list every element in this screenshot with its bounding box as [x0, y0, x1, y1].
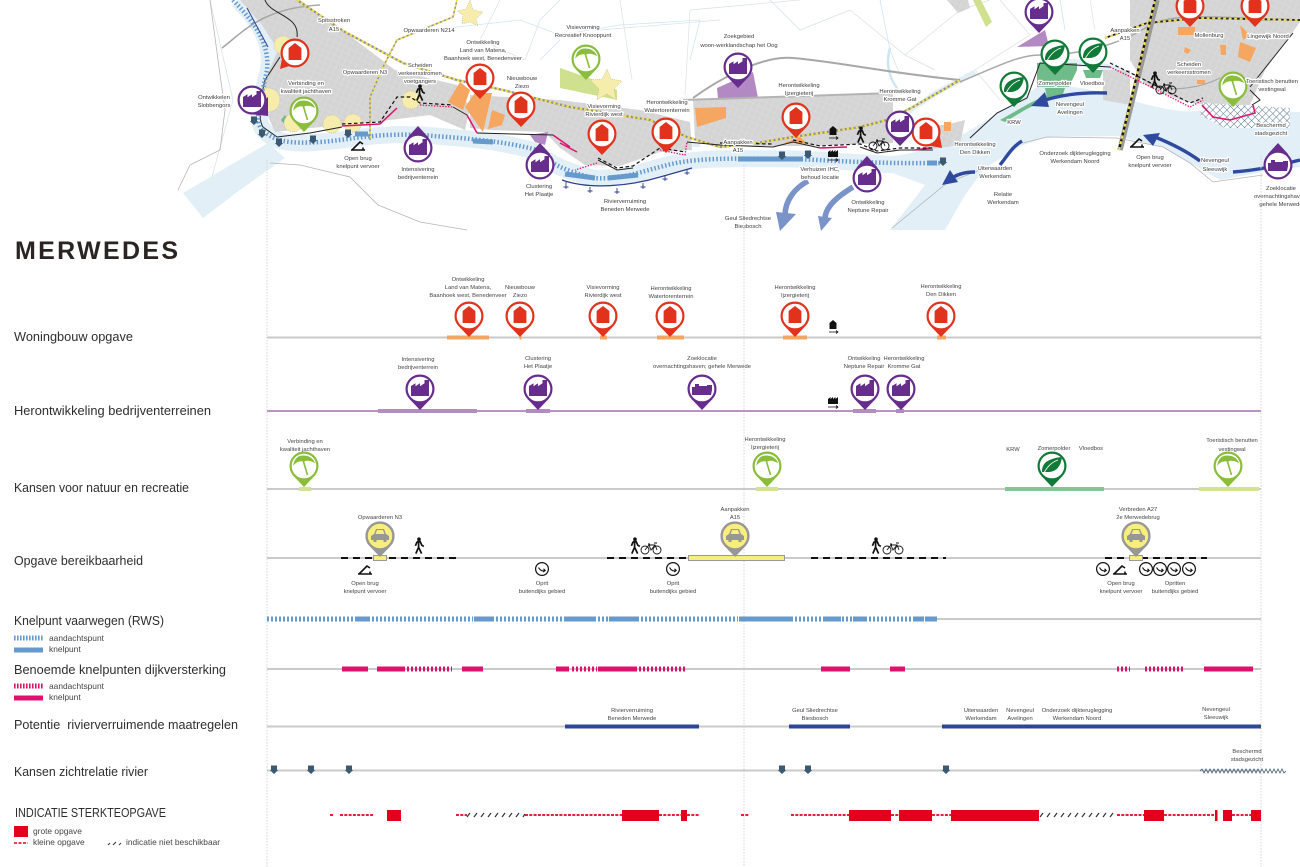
row: Opgave bereikbaarheid: knelpunt vervoer: [344, 589, 386, 595]
map labels: A15: [1120, 36, 1130, 42]
map labels: Intensivering: [401, 167, 435, 173]
map labels: Verbinding en: [288, 81, 324, 87]
row: Herontwikkeling bedrijventerreinen: Clustering: [525, 356, 551, 362]
map labels: Neptune Repair: [848, 208, 889, 214]
map labels: Werkendam: [987, 200, 1019, 206]
row: Opgave bereikbaarheid: Open brug: [1107, 581, 1135, 587]
map labels: Uiterwaarden: [978, 166, 1012, 172]
map labels: Nevengeul: [1201, 158, 1229, 164]
map labels: A15: [329, 27, 339, 33]
map labels: vestingwal: [1258, 87, 1286, 93]
map pins: factories: [405, 0, 1052, 191]
map labels: Ijzergieterij: [785, 91, 813, 97]
map labels: Herontwikkeling: [778, 83, 820, 89]
map labels: Nieuwbouw: [507, 76, 538, 82]
row: Potentie rivierverruimende maatregelen: Rivierverruiming: [611, 708, 653, 714]
row: Woningbouw opgave: Herontwikkeling: [651, 286, 691, 292]
map labels: Rivierdijk west: [585, 112, 623, 118]
map labels: Relatie: [994, 192, 1012, 198]
row: Opgave bereikbaarheid: A15: [730, 515, 740, 521]
row: Herontwikkeling bedrijventerreinen: bedrijventerrein: [398, 365, 438, 371]
row: Woningbouw opgave: Herontwikkeling: [775, 285, 815, 291]
row: Benoemde knelpunten dijkversterking: [14, 663, 1261, 702]
map labels: Biesbosch: [735, 224, 761, 230]
map pins: recreation and nature: [291, 39, 1246, 132]
row: Kansen voor natuur en recreatie: [14, 437, 1261, 495]
map labels: Toeristisch benutten: [1246, 79, 1298, 85]
row: Opgave bereikbaarheid: buitendijks gebied: [650, 589, 696, 595]
row: Indicatie sterkteopgave: INDICATIE STERKTEOPGAVE: [15, 806, 166, 820]
map labels: Beschermd: [1256, 123, 1286, 129]
map labels: Spitsstroken: [318, 18, 350, 24]
shoreline and dike lines: [178, 0, 1263, 230]
row: Opgave bereikbaarheid: Opritten: [1165, 581, 1185, 587]
map labels: Rivierverruiming: [604, 199, 646, 205]
map labels: Zoeklocatie: [1266, 186, 1296, 192]
map labels: Visievorming: [566, 25, 600, 31]
row: Knelpunt vaarwegen: [14, 614, 1261, 654]
row: Knelpunt vaarwegen: Knelpunt vaarwegen (RWS): [14, 614, 164, 628]
row: Opgave bereikbaarheid: [14, 507, 1261, 595]
map labels: KRW: [1007, 120, 1021, 126]
map labels: Mollenburg: [1195, 33, 1223, 39]
pin: factory Slobbengors: [239, 87, 268, 116]
pin: house Den Dikken: [913, 119, 942, 148]
map labels: voetgangers: [404, 79, 436, 85]
row: Indicatie sterkteopgave: grote opgave: [33, 826, 82, 836]
row: Potentie rivierverruimende maatregelen: Geul Sliedrechtse: [792, 708, 838, 714]
row: Knelpunt vaarwegen: knelpunt: [49, 644, 81, 654]
map labels: Werkendam: [979, 174, 1011, 180]
map labels: Opwaarderen N3: [343, 70, 387, 76]
row: Herontwikkeling bedrijventerreinen: Neptune Repair: [844, 364, 884, 370]
map labels: woon-werklandschap het Oog: [699, 43, 778, 49]
map labels: Scheiden: [1177, 62, 1201, 68]
row: Opgave bereikbaarheid: knelpunt vervoer: [1100, 589, 1142, 595]
row: Woningbouw opgave: Land van Matena,: [445, 285, 492, 291]
row: Woningbouw opgave: [14, 277, 1261, 344]
row: Herontwikkeling bedrijventerreinen: Herontwikkeling: [884, 356, 924, 362]
traffic icons on map: [351, 71, 1176, 162]
map pin: ship location: [1265, 143, 1291, 178]
title: MERWEDES: [15, 237, 178, 265]
map labels: behoud locatie: [801, 175, 839, 181]
map labels: Geul Sliedrechtse: [725, 216, 771, 222]
row: Potentie rivierverruimende maatregelen: Werkendam Noord: [1053, 716, 1101, 722]
river water: [183, 0, 1300, 230]
row: Kansen voor natuur en recreatie: vestingwal: [1218, 447, 1246, 453]
map labels: Visievorming: [587, 104, 621, 110]
row: Benoemde knelpunten dijkversterking: knelpunt: [49, 692, 81, 702]
row: Woningbouw opgave: Baanhoek west, Benedenveer: [429, 293, 507, 299]
row: Kansen voor natuur en recreatie: Verbinding en: [287, 439, 323, 445]
map labels: Lingewijk Noord: [1247, 34, 1289, 40]
shipping lane markers: [233, 0, 940, 178]
row: Indicatie sterkteopgave: kleine opgave: [33, 837, 85, 847]
row: Woningbouw opgave: Rivierdijk west: [584, 293, 622, 299]
row: Opgave bereikbaarheid: buitendijks gebied: [519, 589, 565, 595]
row: Benoemde knelpunten dijkversterking: aandachtspunt: [49, 681, 105, 691]
row: Herontwikkeling bedrijventerreinen: Zoeklocatie: [687, 356, 717, 362]
map labels: Clustering: [526, 184, 552, 190]
row: Kansen voor natuur en recreatie: Ijzergieterij: [751, 445, 779, 451]
map labels: Herontwikkeling: [879, 89, 921, 95]
row: Potentie rivierverruimende maatregelen: Biesbosch: [802, 716, 828, 722]
row: Herontwikkeling bedrijventerreinen: Het Plaatje: [524, 364, 552, 370]
map labels: Beneden Merwede: [600, 207, 650, 213]
map labels: Recreatief Knooppunt: [555, 33, 612, 39]
row: Kansen voor natuur en recreatie: Zomerpolder: [1038, 446, 1070, 452]
map labels: Opwaarderen N214: [403, 28, 455, 34]
row: Woningbouw opgave: Visievorming: [586, 285, 620, 291]
map labels: Den Dikken: [960, 150, 990, 156]
map labels: Ontwikkeling: [466, 40, 500, 46]
row: Potentie rivierverruimende maatregelen: [14, 707, 1261, 732]
map labels: [198, 18, 1300, 230]
row: Kansen voor natuur en recreatie: Herontwikkeling: [745, 437, 785, 443]
map labels: verkeersstromen: [398, 71, 442, 77]
row: Kansen voor natuur en recreatie: Vloedbos: [1079, 446, 1103, 452]
row: Indicatie sterkteopgave: indicatie niet beschikbaar: [126, 837, 220, 847]
panel: map of the Merwede river zone: [178, 0, 1300, 231]
map labels: Ontwikkeling: [851, 200, 885, 206]
map labels: knelpunt vervoer: [1128, 163, 1172, 169]
map labels: stadsgezicht: [1255, 131, 1288, 137]
row: Knelpunt vaarwegen: aandachtspunt: [49, 633, 105, 643]
row: Woningbouw opgave: Woningbouw opgave: [14, 330, 133, 344]
row: Herontwikkeling bedrijventerreinen: Kromme Gat: [888, 364, 921, 370]
row: Opgave bereikbaarheid: Verbreden A27: [1119, 507, 1157, 513]
row: Opgave bereikbaarheid: Aanpakken: [720, 507, 750, 513]
map labels: Avelingen: [1057, 110, 1083, 116]
row: Herontwikkeling bedrijventerreinen: Herontwikkeling bedrijventerreinen: [14, 404, 211, 418]
row: Opgave bereikbaarheid: buitendijks gebied: [1152, 589, 1198, 595]
urban areas: [240, 0, 1300, 166]
row: Woningbouw opgave: Den Dikken: [926, 292, 956, 298]
arrows: river widening directions: [776, 92, 1300, 231]
row: Potentie rivierverruimende maatregelen: Sleeuwijk: [1204, 715, 1228, 721]
row: Potentie rivierverruimende maatregelen: Nevengeul: [1202, 707, 1230, 713]
map labels: Ziezo: [515, 84, 529, 90]
row: Kansen zichtrelatie rivier: stadsgezicht: [1231, 757, 1263, 763]
map pins: houses: [467, 0, 1268, 155]
map labels: Herontwikkeling: [646, 100, 688, 106]
row: Herontwikkeling bedrijventerreinen: Ontwikkeling: [848, 356, 880, 362]
row: Opgave bereikbaarheid: Oprit: [536, 581, 549, 587]
map labels: Open brug: [1136, 155, 1164, 161]
row: Benoemde knelpunten dijkversterking: Benoemde knelpunten dijkversterking: [14, 663, 226, 677]
row: Opgave bereikbaarheid: Opgave bereikbaarheid: [14, 554, 143, 568]
map labels: Ontwikkelen: [198, 95, 230, 101]
map labels: Baanhoek west, Benedenveer: [444, 56, 522, 62]
row: Herontwikkeling bedrijventerreinen: overnachtingshaven; gehele Merwede: [653, 364, 751, 370]
map labels: Sleeuwijk: [1203, 167, 1227, 173]
polder lines: [203, 0, 1095, 218]
map labels: Kromme Gat: [883, 97, 917, 103]
map labels: kwaliteit jachthaven: [281, 89, 331, 95]
map labels: Slobbengors: [198, 103, 230, 109]
map labels: verkeersstromen: [1167, 70, 1211, 76]
map labels: Herontwikkeling: [954, 142, 996, 148]
row: Opgave bereikbaarheid: Open brug: [351, 581, 379, 587]
row: Woningbouw opgave: Ziezo: [513, 293, 527, 299]
row: Potentie rivierverruimende maatregelen: Onderzoek dijkteruglegging: [1042, 708, 1112, 714]
map labels: Nevengeul: [1056, 102, 1084, 108]
row: Opgave bereikbaarheid: Oprit: [667, 581, 680, 587]
row: Kansen voor natuur en recreatie: Kansen voor natuur en recreatie: [14, 481, 189, 495]
row: Herontwikkeling bedrijventerreinen: [14, 356, 1261, 418]
row: Kansen zichtrelatie rivier: Beschermd: [1232, 749, 1262, 755]
row: Potentie rivierverruimende maatregelen: Potentie rivierverruimende maatregelen: [14, 718, 238, 732]
map labels: Aanpakken: [1110, 28, 1140, 34]
row: Potentie rivierverruimende maatregelen: Beneden Merwede: [608, 716, 656, 722]
row: Woningbouw opgave: Nieuwbouw: [505, 285, 536, 291]
row: Woningbouw opgave: Ontwikkeling: [452, 277, 484, 283]
row: Potentie rivierverruimende maatregelen: Avelingen: [1007, 716, 1033, 722]
map labels: knelpunt vervoer: [336, 164, 380, 170]
row: Kansen voor natuur en recreatie: KRW: [1006, 447, 1020, 453]
row: Kansen zichtrelatie rivier: Kansen zichtrelatie rivier: [14, 765, 148, 779]
river widening line: [247, 8, 692, 194]
cultural and recreation zones: [256, 0, 622, 133]
map labels: Vloedbos: [1080, 81, 1104, 87]
map labels: Land van Matena,: [460, 48, 507, 54]
row: Potentie rivierverruimende maatregelen: Uiterwaarden: [964, 708, 998, 714]
map labels: Zomerpolder: [1038, 81, 1072, 87]
row: Herontwikkeling bedrijventerreinen: Intensivering: [402, 357, 434, 363]
map labels: Zoekgebied: [724, 34, 754, 40]
row: Opgave bereikbaarheid: 2e Merwedebrug: [1116, 515, 1160, 521]
map labels: bedrijventerrein: [398, 175, 438, 181]
map labels: Werkendam Noord: [1051, 159, 1099, 165]
row: Woningbouw opgave: Ijzergieterij: [781, 293, 809, 299]
row: Opgave bereikbaarheid: Opwaarderen N3: [358, 515, 402, 521]
map labels: Onderzoek dijkteruglegging: [1039, 151, 1111, 157]
pin: house Jachthaven: [280, 40, 308, 69]
row: Woningbouw opgave: Herontwikkeling: [921, 284, 961, 290]
row: Woningbouw opgave: Watertorenterrein: [649, 294, 693, 300]
view markers: [250, 116, 947, 166]
map labels: A15: [733, 148, 743, 154]
map labels: Watertorenterrein: [644, 108, 690, 114]
map labels: Scheiden: [408, 63, 432, 69]
row: Potentie rivierverruimende maatregelen: Nevengeul: [1006, 708, 1034, 714]
map labels: Verhuizen IHC,: [800, 167, 840, 173]
highways and rail: [222, 0, 1300, 150]
row: Kansen voor natuur en recreatie: kwaliteit jachthaven: [280, 447, 330, 453]
map labels: Aanpakken: [723, 140, 753, 146]
dike routes: [260, 0, 1293, 170]
map labels: Open brug: [344, 156, 372, 162]
row: Indicatie sterkteopgave: [14, 806, 1261, 847]
map labels: Het Plaatje: [525, 192, 553, 198]
guide lines: [267, 155, 1261, 867]
development areas: [281, 0, 1290, 145]
row: Potentie rivierverruimende maatregelen: Werkendam: [965, 716, 997, 722]
row: Kansen voor natuur en recreatie: Toeristisch benutten: [1206, 438, 1258, 444]
row: Kansen zichtrelatie rivier: [14, 749, 1286, 779]
